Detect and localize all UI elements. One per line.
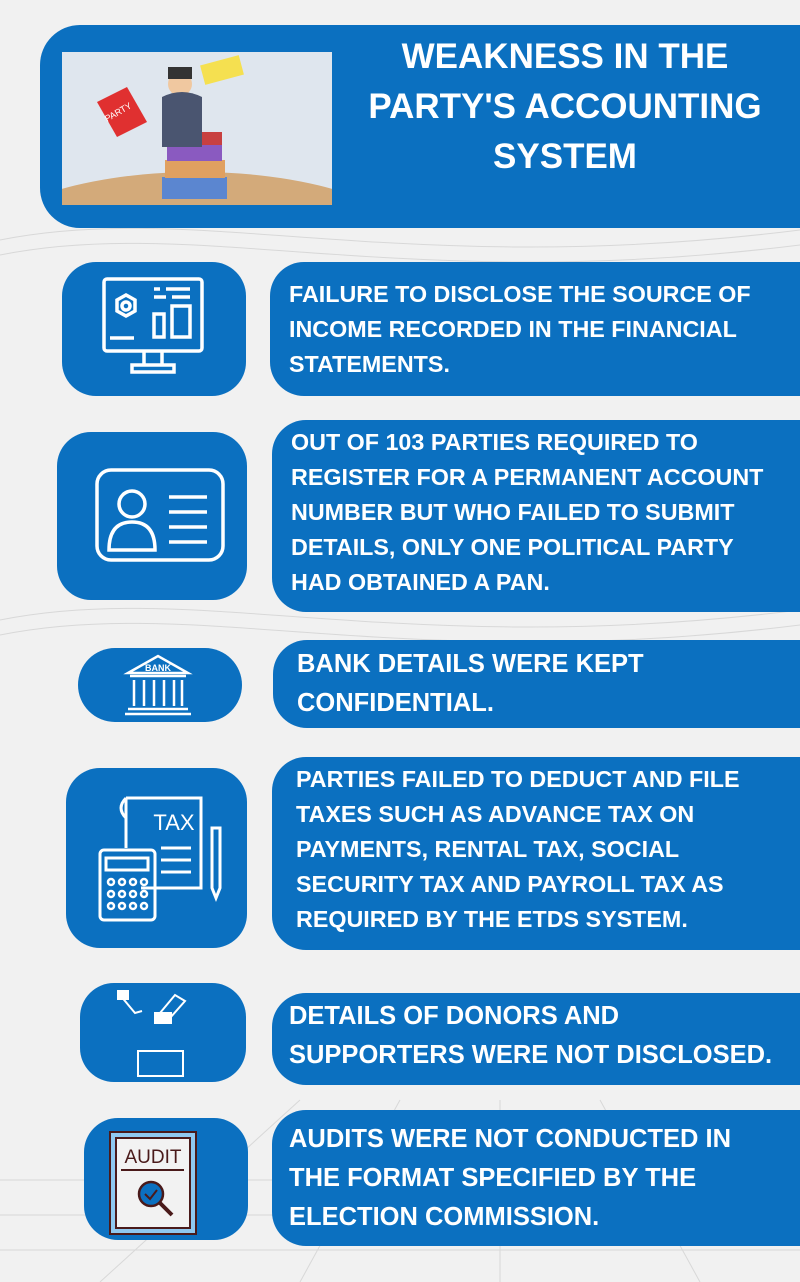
- row 2 text: HAD OBTAINED A PAN.: [291, 568, 550, 594]
- row 4 text: SECURITY TAX AND PAYROLL TAX AS: [296, 871, 724, 897]
- row 2 text: OUT OF 103 PARTIES REQUIRED TO: [291, 428, 698, 454]
- row 2 text: [272, 420, 800, 612]
- row 5 text: SUPPORTERS WERE NOT DISCLOSED.: [289, 1041, 772, 1069]
- title: PARTY'S ACCOUNTING: [368, 87, 762, 126]
- header panel: [40, 25, 800, 228]
- cartoon image: [62, 52, 332, 205]
- row 6 icon: audit: [84, 1118, 248, 1240]
- row 2 text: REGISTER FOR A PERMANENT ACCOUNT: [291, 464, 763, 490]
- row 3 text: CONFIDENTIAL.: [297, 689, 494, 717]
- row 5 text: DETAILS OF DONORS AND: [289, 1002, 619, 1030]
- row 6 text: AUDITS WERE NOT CONDUCTED IN: [289, 1124, 731, 1152]
- cartoon image: PARTY: [103, 100, 133, 124]
- row 3 text: BANK DETAILS WERE KEPT: [297, 650, 644, 678]
- row 4 text: TAXES SUCH AS ADVANCE TAX ON: [296, 801, 694, 827]
- row 6 text: THE FORMAT SPECIFIED BY THE: [289, 1164, 696, 1192]
- row 2 text: DETAILS, ONLY ONE POLITICAL PARTY: [291, 534, 734, 560]
- row 4 text: REQUIRED BY THE ETDS SYSTEM.: [296, 906, 688, 932]
- row 4 icon: tax: [66, 768, 247, 948]
- row 2 icon: id card: [57, 432, 247, 600]
- row 4 text: PAYMENTS, RENTAL TAX, SOCIAL: [296, 836, 679, 862]
- row 3 icon: bank: [78, 648, 242, 722]
- row 1 text: INCOME RECORDED IN THE FINANCIAL: [289, 316, 737, 342]
- row 5 text: [272, 993, 800, 1085]
- title: [368, 37, 762, 176]
- row 1 text: FAILURE TO DISCLOSE THE SOURCE OF: [289, 280, 751, 306]
- row 6 text: [272, 1110, 800, 1246]
- row 4 icon: tax: TAX: [153, 810, 195, 835]
- title: SYSTEM: [493, 137, 637, 176]
- row 2 text: NUMBER BUT WHO FAILED TO SUBMIT: [291, 498, 734, 524]
- row 5 icon: donation: [80, 983, 246, 1082]
- row 4 text: [272, 757, 800, 950]
- title: WEAKNESS IN THE: [402, 37, 728, 76]
- row 6 icon: audit: AUDIT: [124, 1147, 182, 1168]
- row 4 text: PARTIES FAILED TO DEDUCT AND FILE: [296, 766, 740, 792]
- row 1 icon: monitor: [62, 262, 246, 396]
- row 6 text: ELECTION COMMISSION.: [289, 1202, 599, 1230]
- row 1 text: STATEMENTS.: [289, 350, 450, 376]
- row 1 text: [270, 262, 800, 396]
- row 3 icon: bank: BANK: [145, 663, 171, 673]
- row 3 text: [273, 640, 800, 728]
